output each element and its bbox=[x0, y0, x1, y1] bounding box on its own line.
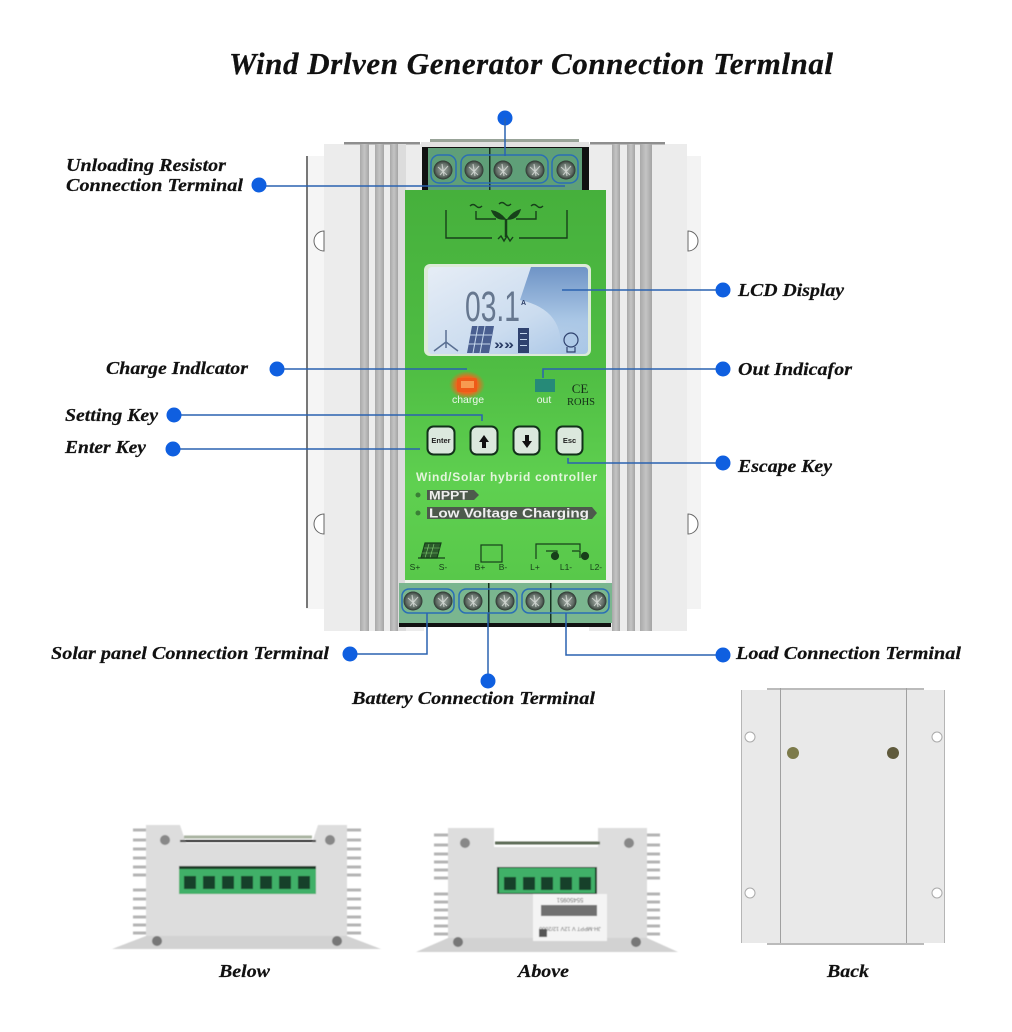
callout: escape key: Escape Key bbox=[737, 456, 833, 476]
callout: load terminal bbox=[566, 613, 961, 663]
LCD display: A bbox=[521, 300, 526, 307]
charge indicator: charge bbox=[452, 394, 484, 406]
down button bbox=[514, 426, 540, 454]
callout: out indicator: Out Indicafor bbox=[738, 359, 853, 379]
callout: load terminal: Load Connection Terminal bbox=[735, 643, 961, 663]
LCD display bbox=[424, 264, 591, 356]
callout: wind generator terminal marker bbox=[498, 110, 512, 156]
up button bbox=[470, 426, 498, 454]
callout: LCD display: LCD Display bbox=[737, 280, 845, 300]
green front panel bbox=[405, 190, 606, 582]
terminal polarity labels: L1- bbox=[560, 562, 572, 572]
back label: Back bbox=[826, 961, 869, 981]
out indicator: out bbox=[537, 394, 551, 406]
title: Wind Drlven Generator Connection Termlnal bbox=[229, 46, 833, 81]
charge indicator bbox=[449, 371, 485, 406]
LCD bulb bbox=[564, 333, 578, 352]
callout: solar panel terminal: Solar panel Connection Terminal bbox=[51, 643, 329, 663]
CE ROHS marks: ROHS bbox=[567, 397, 595, 408]
LCD wind icon bbox=[434, 330, 458, 351]
callout: out indicator bbox=[543, 359, 853, 379]
main controller device bbox=[306, 139, 701, 631]
MPPT tag: MPPT bbox=[429, 488, 469, 502]
connector bbox=[497, 867, 597, 894]
below label: Below bbox=[218, 961, 271, 981]
low voltage tag: Low Voltage Charging bbox=[429, 506, 589, 520]
esc button: Esc bbox=[563, 436, 576, 445]
callout: enter key: Enter Key bbox=[64, 437, 147, 457]
callout: charge indicator: Charge Indlcator bbox=[106, 358, 249, 378]
heatsink fins bbox=[133, 830, 361, 933]
label sticker: 55450951 bbox=[556, 896, 583, 902]
terminal polarity labels: L+ bbox=[530, 562, 540, 572]
LCD reading: 03.1 bbox=[465, 283, 520, 331]
LCD battery bbox=[518, 328, 529, 353]
label sticker: JH-MPPT V 12V 12/2000 bbox=[539, 925, 601, 931]
out indicator bbox=[535, 379, 555, 406]
MPPT tag bbox=[416, 488, 479, 502]
terminal polarity labels: L2- bbox=[590, 562, 602, 572]
callout: setting key bbox=[65, 405, 482, 425]
LCD solar icon bbox=[467, 326, 494, 353]
left heatsink bbox=[306, 142, 424, 631]
below view bbox=[112, 825, 381, 949]
callout: enter key bbox=[64, 437, 420, 457]
above label: Above bbox=[517, 961, 569, 981]
top terminal block bbox=[421, 139, 589, 191]
terminal polarity labels: S+ bbox=[410, 562, 420, 572]
callout: LCD display bbox=[562, 280, 845, 300]
LCD arrows: »» bbox=[494, 336, 514, 352]
terminal polarity labels: S- bbox=[439, 562, 447, 572]
callout: setting key: Setting Key bbox=[65, 405, 159, 425]
callout: charge indicator bbox=[106, 358, 467, 378]
enter button bbox=[428, 426, 454, 454]
callout: solar panel terminal bbox=[51, 613, 427, 663]
callout: battery terminal: Battery Connection Terminal bbox=[351, 688, 595, 708]
above view bbox=[416, 828, 678, 952]
back view bbox=[741, 688, 945, 945]
CE ROHS marks: CE bbox=[572, 381, 588, 396]
callout: unloading resistor bbox=[66, 155, 565, 195]
terminal polarity labels: B- bbox=[499, 562, 507, 572]
bottom terminal block bbox=[399, 580, 612, 627]
callout: battery terminal bbox=[351, 613, 595, 708]
esc button bbox=[556, 426, 582, 454]
enter button: Enter bbox=[431, 436, 451, 445]
terminal polarity labels: B+ bbox=[475, 562, 485, 572]
product name: Wind/Solar hybrid controller bbox=[416, 470, 597, 484]
solar battery load symbols bbox=[418, 543, 588, 562]
CE ROHS marks bbox=[567, 381, 595, 408]
callout: unloading resistor: Connection Terminal bbox=[66, 175, 243, 195]
callout: escape key bbox=[568, 456, 833, 476]
label sticker bbox=[533, 894, 607, 941]
wind turbine symbol bbox=[446, 202, 567, 241]
terminal polarity labels bbox=[410, 562, 602, 572]
heatsink fins bbox=[434, 835, 660, 934]
connector bbox=[179, 866, 316, 894]
buttons bbox=[428, 426, 582, 454]
callout: unloading resistor: Unloading Resistor bbox=[66, 155, 227, 175]
right heatsink bbox=[589, 142, 701, 631]
